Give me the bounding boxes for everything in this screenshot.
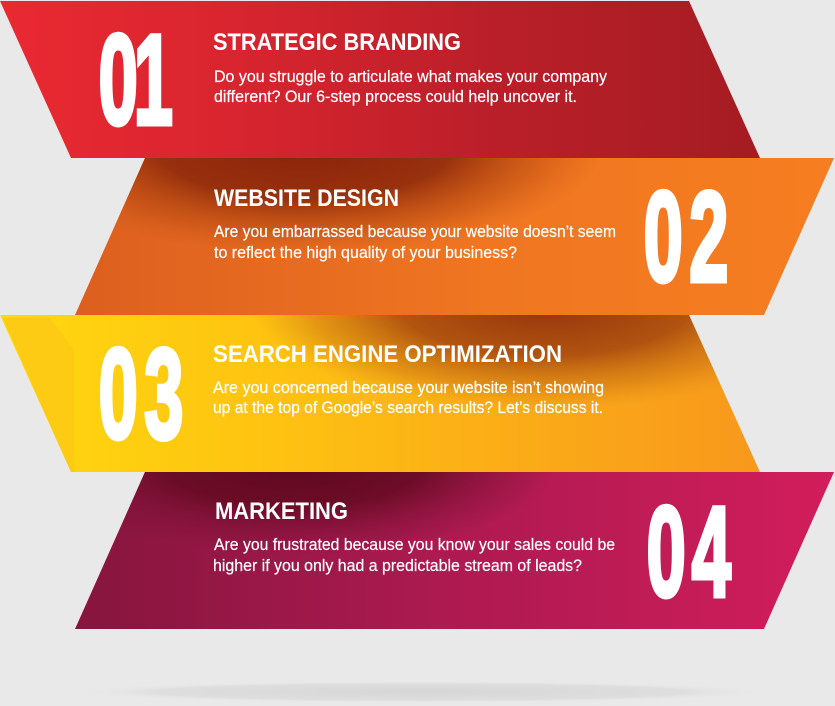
text: search engine optimization description <box>213 379 604 417</box>
band: red <box>0 1 760 158</box>
panel: 04 marketing <box>75 472 834 629</box>
band: yellow <box>0 315 760 472</box>
panel: 03 search engine optimization <box>0 315 760 472</box>
number 04: 04 <box>647 480 731 623</box>
text: marketing description <box>213 536 615 575</box>
band: magenta <box>75 472 834 629</box>
number 02: 02 <box>644 165 728 308</box>
number 03: 03 <box>99 322 183 465</box>
text: marketing description: Are you frustrated because you know your sales could be <box>214 536 615 554</box>
text: search engine optimization description: up at the top of Google’s search results? Let’s discuss it. <box>213 399 603 417</box>
text: website design description: Are you embarrassed because your website doesn’t seem <box>214 223 616 241</box>
text: strategic branding description: different? Our 6-step process could help uncover it. <box>214 88 577 106</box>
text: strategic branding description: Do you struggle to articulate what makes your company <box>214 68 608 86</box>
panel: 01 strategic branding <box>0 1 760 158</box>
text: marketing description: higher if you only had a predictable stream of leads? <box>213 557 582 575</box>
band: orange <box>75 158 834 315</box>
band shadow <box>268 315 719 402</box>
band fold <box>3 318 74 472</box>
text: website design description <box>214 223 616 262</box>
band shadow <box>123 472 540 544</box>
text: search engine optimization description: Are you concerned because your website isn’t showing <box>213 379 604 397</box>
heading: search engine optimization: SEARCH ENGINE OPTIMIZATION <box>213 341 562 368</box>
heading: marketing: MARKETING <box>215 498 348 525</box>
text: website design description: to reflect the high quality of your business? <box>214 244 517 262</box>
band shadow <box>117 158 580 244</box>
ground shadow <box>72 681 772 703</box>
panel: 02 website design <box>75 158 834 315</box>
heading: website design: WEBSITE DESIGN <box>214 185 399 212</box>
number 01: 01 <box>99 8 173 151</box>
text: strategic branding description <box>214 68 608 106</box>
heading: strategic branding: STRATEGIC BRANDING <box>213 29 461 56</box>
